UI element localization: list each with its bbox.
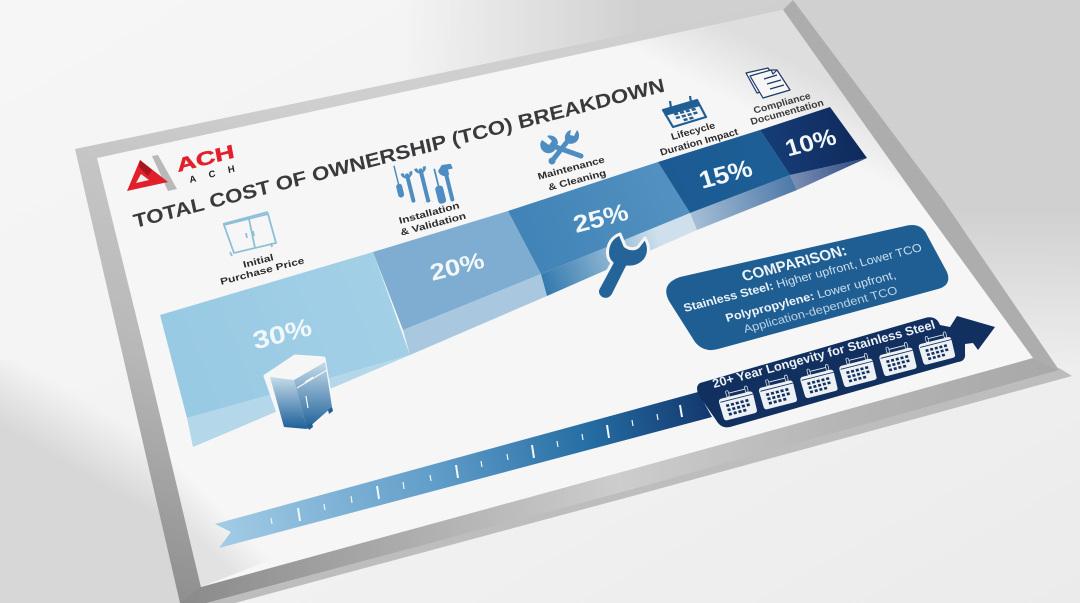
label: lifecycle duration impact: Lifecycle — [670, 121, 717, 143]
icon: crossed wrenches — [540, 130, 581, 164]
callout: comparison: COMPARISON: — [740, 242, 849, 285]
label: maintenance and cleaning: & Cleaning — [547, 169, 607, 193]
callout: comparison — [666, 225, 948, 350]
segment: initial purchase price 30% — [160, 252, 410, 447]
label: installation and validation: Installation — [398, 200, 461, 226]
timeline strip with ticks — [215, 392, 712, 548]
segment: maintenance and cleaning 25% — [508, 162, 697, 296]
callout: comparison: Polypropylene: Lower upfront, — [724, 270, 898, 325]
label: compliance documentation: Compliance — [752, 91, 813, 116]
label: maintenance and cleaning — [537, 155, 607, 193]
title: TOTAL COST OF OWNERSHIP (TCO) BREAKDOWN — [132, 75, 667, 233]
label: maintenance and cleaning: Maintenance — [537, 155, 606, 182]
label: longevity: 20+ Year Longevity for Stainless Steel — [711, 318, 937, 391]
icon: calendar — [663, 96, 706, 127]
logo: ACH: ACH — [175, 142, 236, 177]
icon: installation tools — [391, 163, 460, 205]
label: compliance documentation: Documentation — [749, 98, 825, 128]
segment: lifecycle duration impact 15%: 15% — [696, 155, 756, 194]
label: initial purchase price: Initial — [242, 253, 275, 270]
label: lifecycle duration impact: Duration Impact — [659, 127, 740, 158]
icons: six calendars — [719, 332, 955, 420]
longevity arrow banner — [697, 316, 995, 427]
segment: lifecycle duration impact 15% — [658, 130, 797, 230]
icon: 3D cabinet — [265, 356, 333, 430]
icon: large wrench — [597, 234, 648, 299]
segment: compliance documentation 10%: 10% — [782, 124, 840, 162]
segment: installation and validation 20%: 20% — [427, 248, 487, 286]
segment: installation and validation 20% — [373, 211, 547, 355]
label: installation and validation: & Validation — [399, 211, 467, 238]
logo: ACH: ACH — [189, 160, 248, 186]
panel shadow — [206, 368, 1072, 603]
segment: compliance documentation 10% — [760, 107, 867, 190]
logo: ACH — [127, 142, 248, 191]
paper lighting — [171, 10, 918, 587]
callout: comparison: Application-dependent TCO — [742, 285, 899, 336]
icon: cabinet outline — [223, 212, 276, 256]
callout: comparison: Stainless Steel: Higher upfront, Lower TCO — [682, 242, 924, 315]
bar chart: cost breakdown segments — [160, 107, 867, 447]
icon: compliance documents — [746, 68, 790, 98]
label: initial purchase price: Purchase Price — [219, 256, 306, 287]
segment: maintenance and cleaning 25%: 25% — [570, 198, 631, 238]
segment: initial purchase price 30%: 30% — [250, 312, 314, 355]
